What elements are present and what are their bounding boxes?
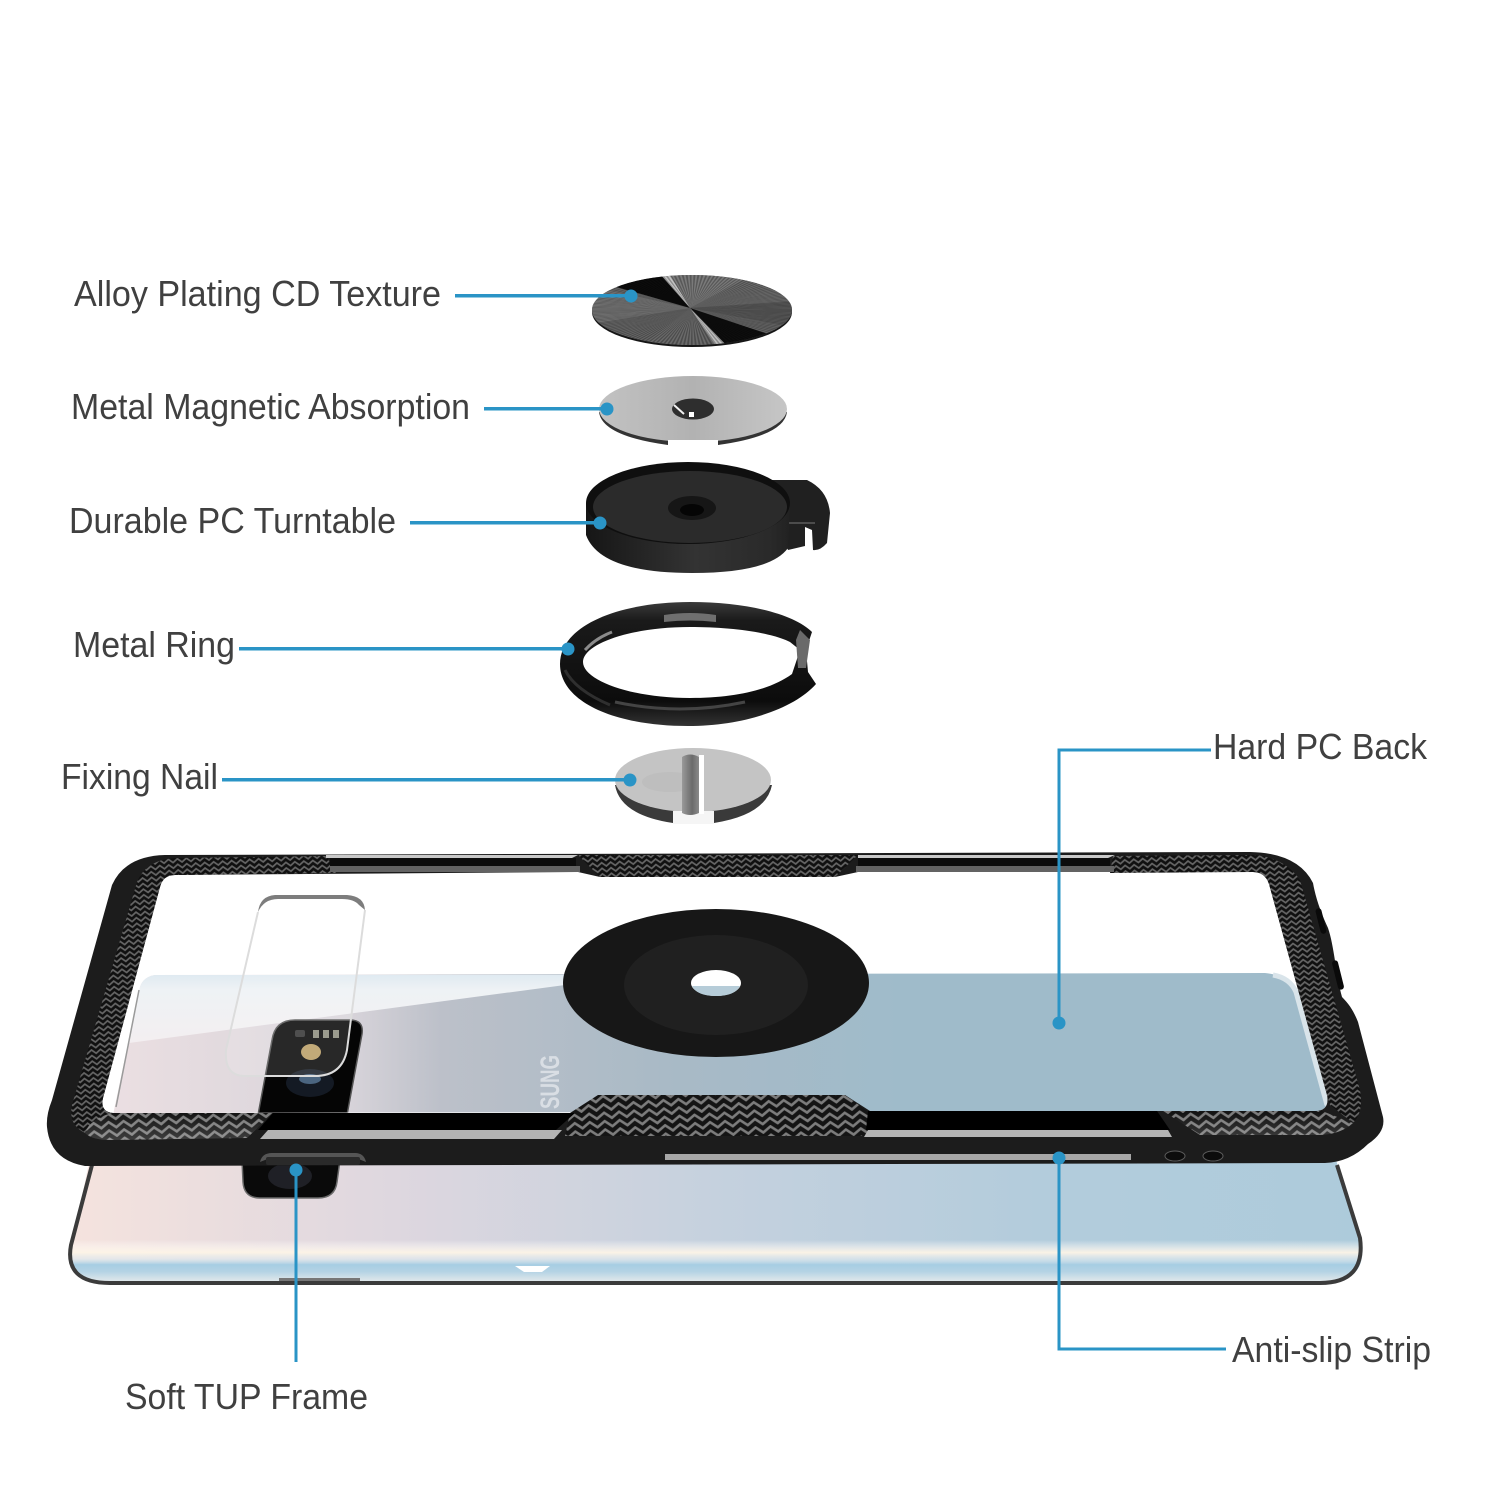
carbon panel bottom left bbox=[85, 1113, 273, 1140]
anti-slip strip bbox=[665, 1154, 1131, 1160]
leader: Alloy Plating CD Texture bbox=[455, 290, 638, 302]
bottom glass edge highlight bbox=[72, 1242, 1362, 1281]
case side buttons bbox=[1315, 908, 1345, 990]
lower camera housing bbox=[242, 1160, 340, 1198]
camera flash bbox=[301, 1044, 321, 1060]
phone left edge shadow bbox=[116, 990, 139, 1107]
camera sensors bbox=[295, 1030, 339, 1038]
black bottom recess bbox=[258, 1111, 1170, 1130]
carbon panel bottom centre bbox=[565, 1095, 872, 1136]
phone bezel line bbox=[70, 1165, 1361, 1283]
phone back glass below the case bbox=[70, 1114, 1363, 1284]
carbon panel bottom left sheen bbox=[85, 1113, 273, 1140]
clear camera cut-out frame bbox=[225, 895, 365, 1076]
label: Soft TUP Frame: Soft TUP Frame bbox=[125, 1376, 368, 1417]
label: Metal Magnetic Absorption: Metal Magnetic Absorption bbox=[71, 386, 470, 427]
label: Metal Ring: Metal Ring bbox=[73, 624, 235, 665]
carbon panel right bbox=[1110, 855, 1361, 1123]
phone lower tinted area bbox=[113, 973, 1328, 1115]
centre magnetic base bbox=[563, 909, 869, 1057]
carbon panel top centre bbox=[578, 855, 858, 877]
case black outer frame bbox=[47, 852, 1383, 1166]
part: magnetic metal sheet bbox=[599, 376, 787, 448]
glass reflection bbox=[130, 975, 564, 1043]
leader: Anti-slip Strip bbox=[1052, 1152, 1226, 1349]
back panel seen through clear window bbox=[113, 973, 1328, 1115]
label: Alloy Plating CD Texture: Alloy Plating CD Texture bbox=[74, 273, 441, 314]
label: Anti-slip Strip: Anti-slip Strip bbox=[1232, 1329, 1431, 1370]
phone lower edge tab bbox=[279, 1278, 360, 1281]
leader: Durable PC Turntable bbox=[410, 516, 606, 530]
SUNG wordmark: SUNG bbox=[535, 1055, 565, 1109]
exploded diagram of phone case bbox=[46, 275, 1430, 1410]
leader: Fixing Nail bbox=[222, 774, 636, 786]
part: fixing nail bbox=[615, 748, 772, 824]
leader: Hard PC Back bbox=[1052, 750, 1211, 1030]
white logo fragment bbox=[515, 1266, 550, 1272]
phone right edge glow bbox=[1273, 975, 1327, 1105]
phone body under case bbox=[68, 1162, 1363, 1285]
part: metal ring bbox=[560, 602, 816, 726]
speaker holes bbox=[1165, 1151, 1223, 1161]
carbon panel bottom right sheen bbox=[1163, 1111, 1353, 1135]
part: alloy CD texture disc bbox=[592, 275, 792, 347]
leader: Metal Ring bbox=[239, 642, 574, 656]
camera lens bbox=[286, 1069, 334, 1097]
bottom edge buttons bbox=[260, 1153, 366, 1162]
phone case frame bbox=[47, 852, 1383, 1166]
part: PC turntable bbox=[586, 462, 830, 573]
carbon panel left bbox=[71, 856, 336, 1133]
lower camera lens bbox=[268, 1163, 312, 1189]
camera module bbox=[258, 1020, 362, 1115]
label: Durable PC Turntable: Durable PC Turntable bbox=[69, 500, 396, 541]
leader: Metal Magnetic Absorption bbox=[484, 402, 614, 416]
label: Fixing Nail: Fixing Nail bbox=[61, 756, 218, 797]
gray bottom strips bbox=[260, 1130, 1172, 1139]
leader: Soft TUP Frame bbox=[290, 1164, 302, 1362]
label: Hard PC Back: Hard PC Back bbox=[1213, 726, 1428, 767]
carbon panel bottom right bbox=[1163, 1111, 1353, 1135]
top gray edge strip bbox=[326, 855, 1115, 872]
